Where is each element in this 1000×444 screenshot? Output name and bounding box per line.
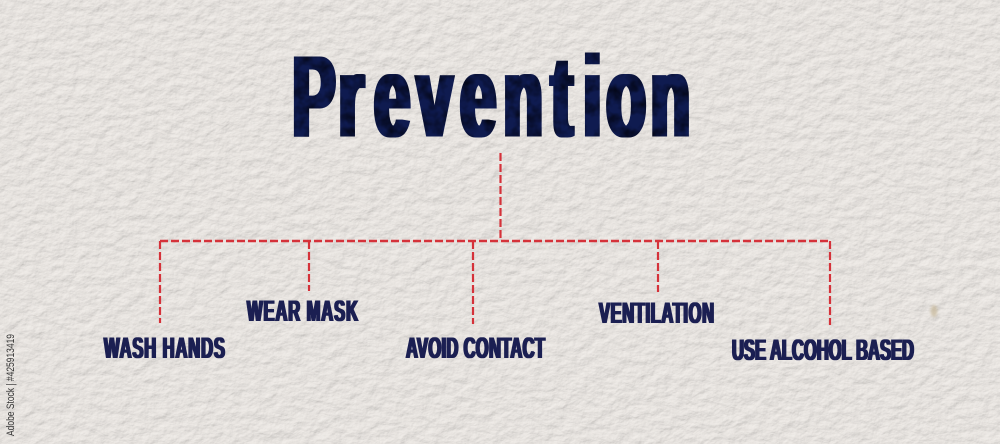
connector: wear mask — [308, 241, 310, 291]
label: ventilation: VENTILATION — [599, 297, 714, 330]
connector: title stem — [499, 153, 502, 241]
labels — [104, 295, 914, 367]
label: wear mask: WEAR MASK — [247, 295, 359, 328]
dashed connector tree — [160, 153, 831, 325]
connector: avoid contact — [472, 241, 474, 324]
label: use alcohol based: USE ALCOHOL BASED — [732, 334, 914, 367]
connector: wash hands — [159, 241, 161, 323]
stock image credit: Adobe Stock | #425913419 — [5, 334, 17, 436]
label: wash hands: WASH HANDS — [104, 332, 225, 365]
title: Prevention — [293, 31, 690, 161]
connector: ventilation — [657, 241, 659, 292]
connector: horizontal bus — [160, 240, 831, 242]
connector: use alcohol based — [829, 241, 831, 325]
label: avoid contact: AVOID CONTACT — [406, 332, 545, 365]
